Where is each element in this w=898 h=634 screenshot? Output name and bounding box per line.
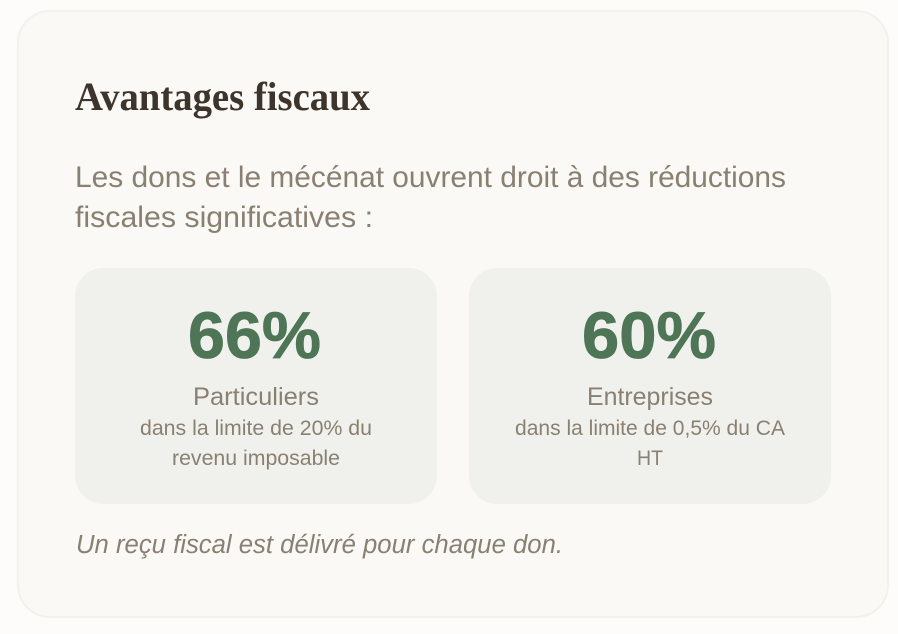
intro text: fiscales significatives : bbox=[75, 201, 373, 234]
note: limite particuliers bbox=[140, 417, 372, 470]
note: limite entreprises: dans la limite de 0,5% du CA bbox=[515, 417, 785, 440]
stat: 66%: 66% bbox=[188, 298, 321, 372]
label: entreprises: Entreprises bbox=[587, 383, 713, 411]
note: limite particuliers: dans la limite de 20% du bbox=[140, 417, 372, 440]
footnote: Un reçu fiscal est délivré pour chaque don. bbox=[76, 531, 563, 559]
card: particuliers bbox=[75, 268, 437, 504]
stat: 60%: 60% bbox=[582, 298, 716, 372]
note: limite particuliers: revenu imposable bbox=[172, 447, 340, 470]
note: limite entreprises: HT bbox=[637, 447, 663, 470]
card: entreprises bbox=[469, 268, 831, 504]
intro text: Les dons et le mécénat ouvrent droit à des réductions bbox=[75, 161, 786, 194]
title: Avantages fiscaux bbox=[75, 74, 370, 119]
intro text bbox=[75, 161, 786, 234]
note: limite entreprises bbox=[515, 417, 785, 470]
label: particuliers: Particuliers bbox=[193, 383, 319, 411]
